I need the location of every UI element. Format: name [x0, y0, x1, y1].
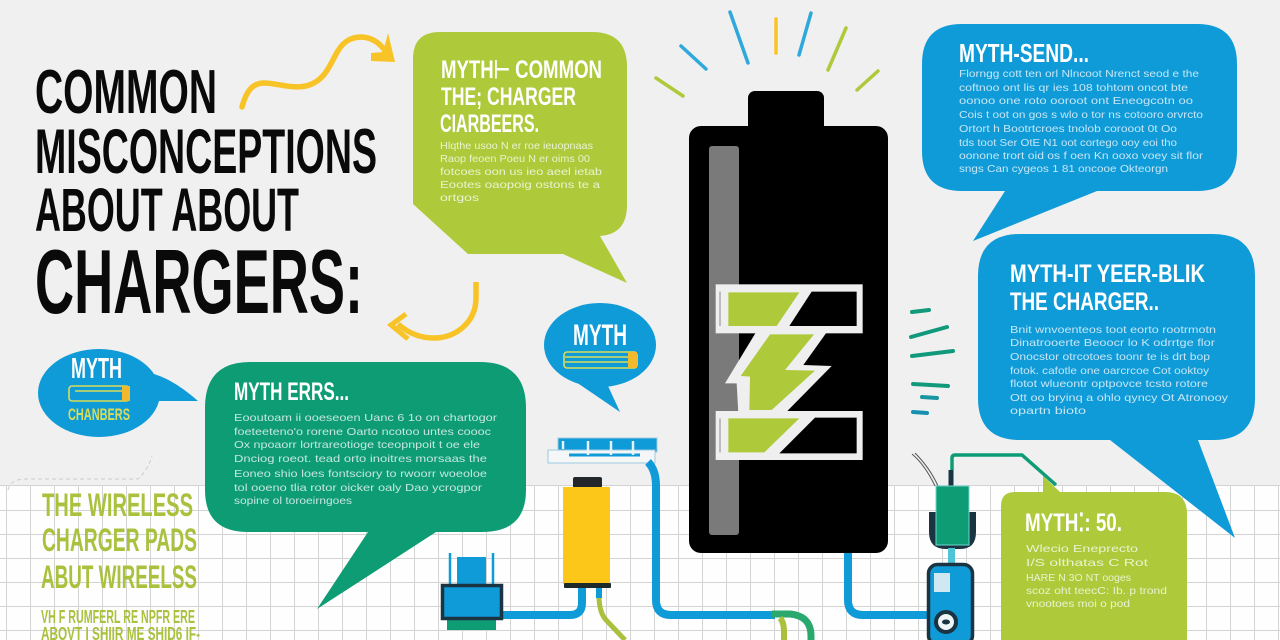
- body text: teal bubble: tol ooeno tlia rotor oicker oaly Dao ycrogpor: [234, 482, 483, 494]
- text block: wireless charger pads: THE WIRELESS: [42, 487, 193, 523]
- panel: blue myth bubble top right: [922, 24, 1237, 241]
- body text: top blue bubble: Ortort h Bootrtcroes tnolob corooot 0t Oo: [959, 123, 1177, 135]
- body text: bottom lime bubble: scoz oht teecC: Ib. p trond: [1026, 585, 1167, 597]
- body text: teal bubble: [234, 412, 498, 507]
- body text: lime bubble: Eootes oaopoig ostons te a: [440, 179, 600, 191]
- arrow: lower yellow curve: [391, 282, 476, 339]
- body text: top blue bubble: coftnoo ont lis qr ies 108 tohtom oncot bte: [959, 82, 1188, 94]
- text block: wireless charger pads: [41, 487, 200, 640]
- panel: small blue myth bubble centre: [544, 303, 656, 412]
- panel: small blue myth bubble left: [38, 349, 198, 437]
- body text: bottom lime bubble: vnootoes moi o pod: [1026, 598, 1130, 610]
- body text: middle blue bubble: Onocstor otrcotoes toonr te is drt bop: [1010, 351, 1210, 363]
- body text: teal bubble: sopine ol toroeirngoes: [234, 495, 352, 507]
- heading: lime bubble: THE; CHARGER: [441, 83, 576, 111]
- heading: lime bubble: MYTH⊢ COMMON: [441, 56, 602, 84]
- title: CHARGERS:: [35, 232, 363, 333]
- text block: wireless charger pads: ABUT WIREELSS: [41, 559, 197, 595]
- heading: bottom lime bubble: MYTH⁚: 50.: [1025, 509, 1122, 537]
- heading: middle blue bubble: MYTH-IT YEER-BLIK: [1010, 260, 1205, 288]
- label: myth: MYTH: [71, 353, 122, 385]
- heading: lime bubble: CIARBEERS.: [440, 110, 539, 138]
- body text: lime bubble: ortgos: [440, 192, 479, 204]
- title: COMMON: [35, 58, 217, 127]
- label: myth: MYTH: [573, 319, 627, 352]
- panel: teal myth bubble: [205, 362, 526, 609]
- body text: lime bubble: fotcoes oon us ieo aeel ietab: [440, 166, 602, 178]
- body text: top blue bubble: oonoo one roto ooroot ont Eneogcotn oo: [959, 95, 1193, 107]
- body text: teal bubble: Eooutoam ii ooeseoen Uanc 6 1o on chartogor: [234, 412, 498, 424]
- text block: wireless charger pads: VH F RUMFERL RE NPFR ERE: [41, 607, 195, 627]
- heading: lime bubble: [440, 56, 602, 138]
- body text: teal bubble: Dnciog roeot. tead orto inoitres morsaas the: [234, 453, 487, 465]
- icon: connector strip: [548, 438, 657, 463]
- panel: blue myth bubble middle right: [978, 234, 1255, 538]
- icon: battery: [564, 352, 637, 368]
- body text: lime bubble: Raop feoen Poeu N er oims 00: [440, 153, 590, 165]
- icon: yellow battery: [563, 477, 611, 588]
- body text: teal bubble: Eoneo shio loes fontsciory to rwoorr woeoloe: [234, 468, 487, 480]
- panel: lime myth bubble bottom: [1001, 476, 1187, 640]
- icon: blue plug: [442, 553, 502, 630]
- icon: side ticks: [911, 310, 953, 413]
- icon: large black battery: [689, 91, 888, 553]
- heading: teal bubble: MYTH ERRS...: [234, 378, 349, 406]
- body text: lime bubble: [440, 140, 602, 204]
- icon: lightning bolt: [716, 284, 863, 460]
- heading: top blue bubble: MYTH-SEND...: [959, 38, 1089, 68]
- heading: middle blue bubble: THE CHARGER..: [1010, 288, 1159, 316]
- body text: middle blue bubble: Dinatrooerte Beoocr lo K odrrtge flor: [1010, 337, 1216, 349]
- wires: [503, 462, 930, 640]
- icon: sparks above battery: [656, 12, 878, 96]
- body text: top blue bubble: [959, 68, 1204, 175]
- body text: middle blue bubble: Ott oo bryinq a ohlo qyncy Ot Atronooy: [1010, 392, 1229, 404]
- body text: middle blue bubble: Bnit wnvoenteos toot eorto rootrmotn: [1010, 324, 1216, 336]
- icon: teal charger and phone: [912, 453, 1056, 640]
- title: [35, 58, 377, 333]
- body text: middle blue bubble: flotot wlueontr optpovce tcsto rotore: [1010, 378, 1208, 390]
- label: chargers: CHANBERS: [68, 405, 130, 424]
- icon: battery: [69, 386, 130, 401]
- body text: teal bubble: foeteeteno'o rorene Oarto ncotoo untes coooc: [234, 426, 491, 438]
- title: ABOUT ABOUT: [35, 176, 299, 244]
- text block: wireless charger pads: CHARGER PADS: [42, 522, 197, 558]
- body text: top blue bubble: oonone trort oid os f oen Kn ooxo voey sit flor: [959, 150, 1204, 162]
- body text: top blue bubble: tds toot Ser OtE N1 oot cortego ooy eoi tho: [959, 137, 1177, 149]
- body text: middle blue bubble: fotok. cafotle one oarcrcoe Cot ooktoy: [1010, 365, 1210, 377]
- body text: top blue bubble: sngs Can cygeos 1 81 oncooe Okteorgn: [959, 163, 1168, 175]
- panel: lime myth bubble: [413, 32, 627, 283]
- body text: bottom lime bubble: HARE N 3O NT ooges: [1026, 572, 1131, 584]
- body text: top blue bubble: Cois t oot on gos s wlo o tor ns cotooro orvrcto: [959, 109, 1203, 121]
- body text: bottom lime bubble: Wlecio Eneprecto: [1026, 543, 1138, 555]
- title: MISCONCEPTIONS: [35, 117, 377, 187]
- body text: lime bubble: Hlqthe usoo N er roe ieuopnaas: [440, 140, 593, 152]
- heading: middle blue bubble: [1010, 260, 1205, 316]
- body text: bottom lime bubble: I/S olthatas C Rot: [1026, 557, 1148, 569]
- body text: bottom lime bubble: [1026, 543, 1167, 610]
- arrow: top yellow squiggle: [242, 33, 395, 107]
- body text: middle blue bubble: [1010, 324, 1229, 417]
- body text: middle blue bubble: opartn bioto: [1010, 405, 1086, 417]
- body text: teal bubble: Ox npoaorr lortrareotioge tceopnpoit t oe ele: [234, 439, 480, 451]
- body text: top blue bubble: Florngg cott ten orl Nlncoot Nrenct seod e the: [959, 68, 1199, 80]
